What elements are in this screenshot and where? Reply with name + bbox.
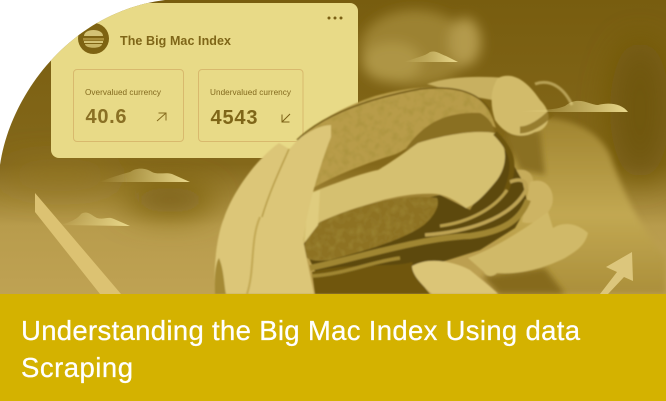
decorative mountain lines [60,51,628,226]
stat box: overvalued currency: Overvalued currency [85,88,162,97]
title text: Understanding the Big Mac Index Using data [21,315,581,346]
lettuce [468,212,588,276]
dark under burger [303,150,528,282]
cheese [303,132,505,244]
burger and hands foreground [215,76,588,294]
diagonal arrow down [35,193,121,294]
lower bun [312,262,430,294]
arrow down-left [282,114,290,122]
arrow up-right [157,113,166,121]
tomato [405,113,494,150]
photo background [0,0,666,294]
stat box: undervalued currency: Undervalued currency [210,88,292,97]
menu dots [328,16,342,20]
left hand [215,125,331,294]
bottom finger [412,261,498,294]
logo: burger icon [78,23,109,54]
patty [302,197,438,261]
ring and knuckle [492,76,548,136]
onion rings [440,190,507,226]
diagonal arrow up [600,252,633,294]
dashboard card [51,3,358,158]
title banner [0,294,666,401]
right hand details [428,76,499,100]
title text: Scraping [21,352,133,383]
top bun [297,87,496,190]
stat box: overvalued currency: 40.6 [86,106,126,128]
stat box: overvalued currency [74,70,184,142]
stat box: undervalued currency: 4543 [210,107,258,129]
stat box: undervalued currency [198,70,303,142]
card title: The Big Mac Index [120,34,231,48]
blurred right hand [514,117,666,294]
